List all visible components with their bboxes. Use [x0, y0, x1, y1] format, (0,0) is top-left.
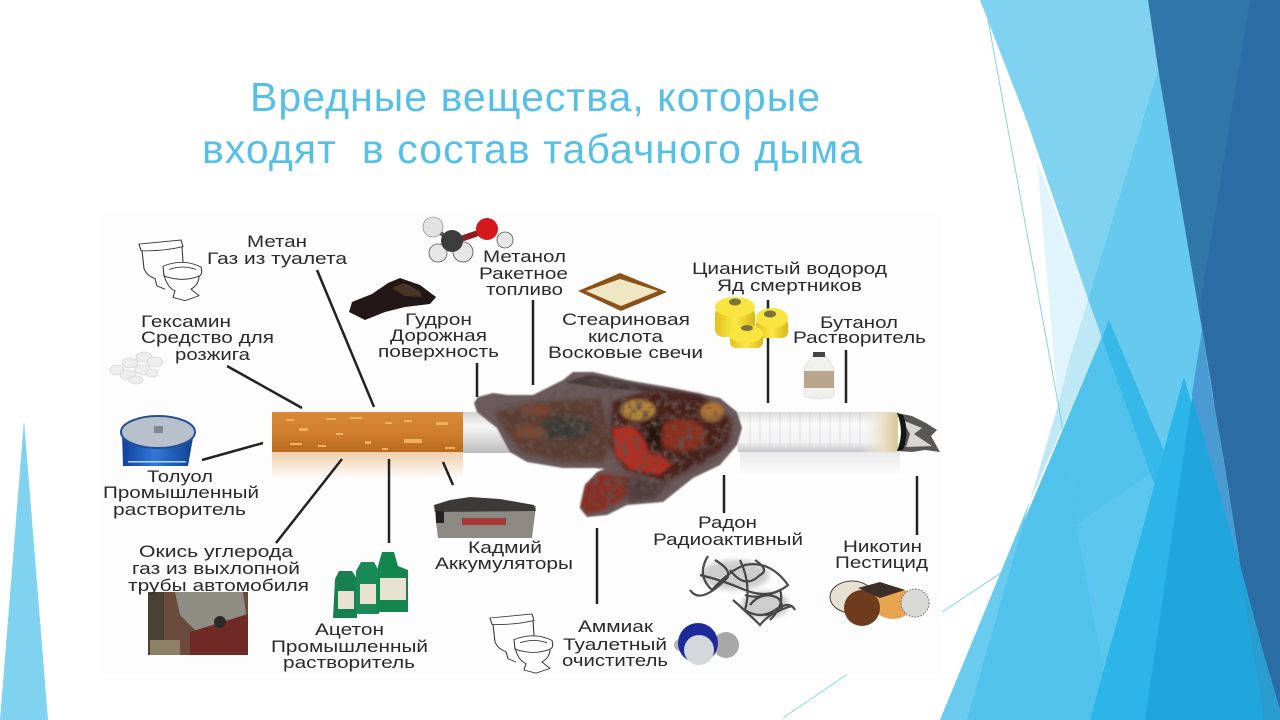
labels	[103, 233, 928, 672]
pale lower band	[1030, 299, 1102, 501]
icon: toilet (ammonia)	[490, 614, 553, 673]
labels: Растворитель	[793, 329, 926, 347]
white paper	[738, 412, 898, 452]
labels: Радон	[698, 514, 757, 532]
icon: ammonia molecule	[674, 623, 739, 665]
labels: Никотин	[843, 538, 922, 556]
labels: растворитель	[113, 501, 246, 519]
steel blue band	[1148, 0, 1280, 710]
labels: Средство для	[141, 329, 274, 347]
labels: Кадмий	[468, 539, 542, 557]
labels: Дорожная	[390, 327, 487, 345]
labels: Радиоактивный	[653, 531, 803, 549]
labels: Толуол	[147, 468, 213, 486]
smoke wisps	[690, 556, 795, 625]
decorative geometric shapes: right side	[783, 0, 1280, 720]
medium blue band	[1088, 69, 1280, 720]
labels: Газ из туалета	[207, 250, 348, 268]
lung lower lobe	[581, 474, 640, 514]
medium-blue accent strip	[1102, 320, 1277, 720]
dark blue band	[1200, 0, 1280, 710]
lighter left strip of large triangle	[940, 501, 1030, 720]
labels: Гексамин	[141, 313, 231, 331]
labels: Стеариновая	[562, 311, 690, 329]
labels: Ацетон	[315, 621, 384, 639]
lung left lobe	[495, 398, 612, 462]
icon: yellow cyanide canisters	[715, 297, 788, 348]
ash tip	[897, 413, 940, 452]
title	[202, 74, 862, 172]
labels: Яд смертников	[717, 277, 862, 295]
cigarette	[272, 412, 940, 480]
labels: Цианистый водород	[692, 260, 887, 278]
icon: acetone bottles	[333, 552, 408, 618]
thin accent lines	[783, 20, 1152, 718]
labels: кислота	[588, 328, 664, 346]
labels: газ из выхлопной	[132, 560, 300, 578]
icon: gas mask photo	[148, 592, 248, 655]
connector lines	[202, 270, 917, 604]
labels: Метанол	[483, 248, 566, 266]
muted blue wedge	[1192, 330, 1243, 583]
icon: stearic acid tray	[578, 273, 667, 311]
pale sliver	[1037, 161, 1088, 405]
icon: car battery	[434, 497, 536, 538]
labels: Гудрон	[405, 311, 472, 329]
icon: tobacco and cigarette bundle	[830, 581, 929, 626]
lung red core	[612, 425, 672, 475]
lung upper membrane	[565, 375, 715, 402]
title: Вредные вещества, которые	[250, 74, 820, 120]
icon: blue barrel	[121, 416, 195, 466]
infographic panel	[103, 215, 942, 675]
labels: трубы автомобиля	[128, 577, 309, 595]
paper reflection	[740, 452, 900, 478]
lung tan patches	[620, 399, 656, 421]
icon: toilet (methane)	[139, 240, 202, 301]
labels: розжига	[175, 346, 251, 364]
icon: hexamine tablets	[110, 352, 163, 384]
decorative triangle: left	[0, 420, 48, 720]
labels: топливо	[486, 281, 563, 299]
large triangle	[940, 320, 1277, 720]
labels: Ракетное	[479, 265, 568, 283]
cigarette filter	[272, 412, 463, 452]
lung	[474, 372, 742, 517]
burnt paper	[862, 413, 898, 452]
title: входят в состав табачного дыма	[202, 126, 862, 172]
small triangle	[1090, 377, 1280, 720]
lung dark mottling	[539, 416, 591, 440]
smoke haze	[701, 560, 789, 619]
labels: поверхность	[378, 343, 499, 361]
labels: Аккумуляторы	[435, 555, 573, 573]
labels: Метан	[247, 233, 307, 251]
icon: methanol molecule	[423, 217, 513, 262]
labels: Пестицид	[835, 554, 928, 572]
labels: Туалетный	[563, 636, 667, 654]
labels: очиститель	[562, 652, 668, 670]
labels: растворитель	[283, 654, 415, 672]
filter reflection	[272, 452, 463, 480]
labels: Промышленный	[271, 638, 428, 656]
lung right lobe dark	[610, 390, 732, 482]
labels: Промышленный	[103, 484, 259, 502]
icon: butanol bottle	[804, 352, 834, 399]
labels: Бутанол	[820, 314, 898, 332]
icon: tar lump	[349, 278, 436, 320]
icon: radon smoke	[690, 556, 795, 625]
grey mid section	[463, 412, 513, 453]
lighter lower region of large triangle	[1076, 473, 1239, 720]
lung tissue texture	[495, 378, 735, 513]
deep blue wedge	[1145, 330, 1280, 720]
labels: Аммиак	[578, 618, 654, 636]
labels: Окись углерода	[139, 543, 294, 561]
light blue band	[980, 0, 1158, 299]
labels: Восковые свечи	[548, 344, 703, 362]
lower right sliver	[1238, 557, 1280, 720]
